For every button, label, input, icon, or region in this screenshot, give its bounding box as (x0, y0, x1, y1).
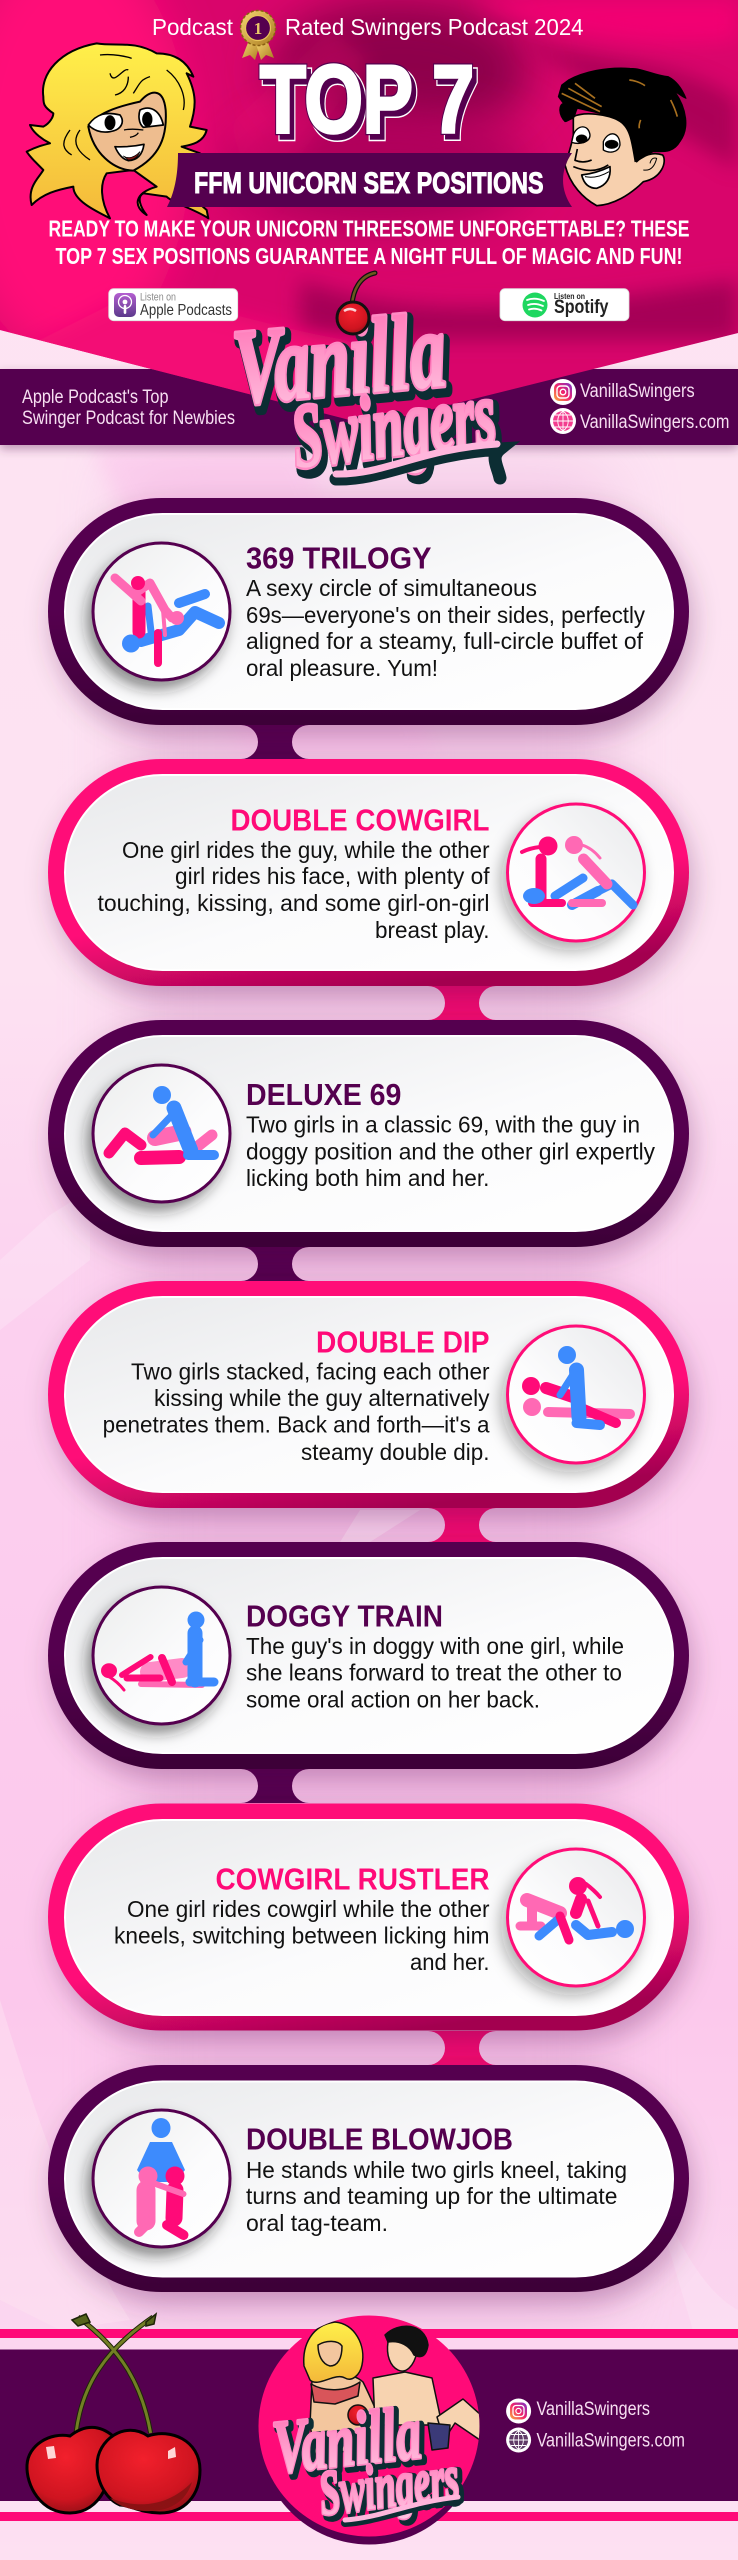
band text: Apple Podcast's top: Apple Podcast's Top (22, 387, 168, 408)
logo: footer Vanilla Swingers: Vanilla (269, 2391, 425, 2490)
panel: Deluxe 69 (48, 1020, 689, 1247)
title: TOP 7: TOP 7 (264, 51, 478, 158)
description: Two girls in a classic 69, with the guy in (246, 1112, 640, 1138)
badge: Apple Podcasts (109, 289, 238, 321)
icon: Instagram (550, 379, 576, 405)
connector: card 1 to 2 (241, 725, 309, 759)
description: oral tag-team. (246, 2210, 388, 2236)
icon: double cowgirl pictogram (508, 804, 644, 941)
icon: podcast symbol (114, 293, 136, 317)
description: girl rides his face, with plenty of (175, 863, 490, 889)
description: A sexy circle of simultaneous (246, 575, 537, 601)
footer bands (0, 2329, 738, 2521)
ribbon: subtitle banner (167, 153, 572, 207)
icon: double blowjob pictogram (93, 2110, 230, 2247)
description: Two girls stacked, facing each other (131, 1358, 490, 1384)
heading: DELUXE 69 (246, 1077, 401, 1112)
icon: globe (550, 408, 576, 434)
social links: VanillaSwingers (580, 381, 695, 402)
panel: 369 Trilogy (48, 498, 689, 725)
logo word: Vanilla (229, 291, 454, 433)
logo word: Swingers: Swingers (286, 362, 501, 488)
logo: footer Vanilla Swingers: Swingers (318, 2444, 466, 2532)
description: kneels, switching between licking him (114, 1922, 490, 1948)
description: steamy double dip. (301, 1439, 490, 1465)
character: blonde woman head (27, 43, 208, 218)
description: doggy position and the other girl expertly (246, 1138, 655, 1164)
header drape background (0, 0, 738, 430)
connector: card 5 to 6 (241, 1769, 309, 1803)
logo word: Swingers: Swingers (286, 362, 501, 488)
icon: number one medal: 1 (254, 19, 262, 38)
badge: Apple Podcasts: Listen on (140, 292, 176, 304)
top rating line: Podcast (152, 14, 233, 40)
connector: card 6 to 7 (428, 2031, 496, 2065)
description: The guy's in doggy with one girl, while (246, 1633, 624, 1659)
title: TOP 7: TOP 7 (264, 51, 478, 158)
heading: DOUBLE BLOWJOB (246, 2122, 513, 2157)
description (103, 1358, 490, 1465)
panel: Cowgirl Rustler (48, 1804, 689, 2030)
heading: DOUBLE COWGIRL (230, 803, 490, 838)
description: penetrates them. Back and forth—it's a (103, 1412, 490, 1438)
description (246, 575, 645, 681)
badge: Spotify (500, 289, 629, 321)
logo word: Swingers: Swingers (290, 366, 505, 492)
icon: number one medal (240, 10, 276, 60)
description: One girl rides the guy, while the other (122, 837, 490, 863)
band text: Apple Podcast's top (22, 387, 235, 429)
title: TOP 7: TOP 7 (260, 46, 474, 153)
connector: card 4 to 5 (428, 1508, 496, 1542)
panel: Double Blowjob (48, 2065, 689, 2292)
description (98, 837, 490, 943)
intro text (48, 216, 690, 269)
icon: footer globe (506, 2428, 531, 2452)
band: podcast info strip (0, 369, 738, 445)
band text: Apple Podcast's top: Swinger Podcast for Newbies (22, 408, 235, 429)
connector: card 3 to 4 (241, 1247, 309, 1281)
description: licking both him and her. (246, 1165, 489, 1191)
description: He stands while two girls kneel, taking (246, 2157, 627, 2183)
description: she leans forward to treat the other to (246, 1660, 622, 1686)
icon: cherry (337, 273, 375, 334)
description: aligned for a steamy, full-circle buffet of (246, 628, 644, 654)
badge: footer circle with characters and logo (258, 2316, 482, 2544)
heading: 369 TRILOGY (246, 541, 432, 576)
description: some oral action on her back. (246, 1686, 540, 1712)
logo: footer Vanilla Swingers: Vanilla (272, 2394, 428, 2493)
icon: footer cherry (348, 2405, 368, 2425)
icon: Spotify symbol (522, 292, 548, 318)
description (246, 1633, 624, 1712)
description: breast play. (375, 917, 490, 943)
logo word: Vanilla: Vanilla (229, 291, 450, 428)
description (246, 2157, 627, 2236)
panel: Double Cowgirl (48, 759, 689, 986)
logo: footer Vanilla Swingers: Vanilla (269, 2391, 425, 2490)
title: TOP 7: TOP 7 (260, 46, 474, 153)
footer social links: VanillaSwingers.com (536, 2431, 685, 2452)
heading: DOUBLE DIP (316, 1324, 490, 1359)
badge: Apple Podcasts: Apple Podcasts (140, 302, 232, 319)
description: 69s—everyone's on their sides, perfectly (246, 602, 645, 628)
logo: footer Vanilla Swingers: Swingers (315, 2441, 463, 2529)
ribbon: subtitle banner: FFM UNICORN SEX POSITIONS (194, 167, 544, 200)
description (246, 1112, 655, 1191)
icon: twin cherries (27, 2314, 200, 2513)
icon: footer Instagram (506, 2398, 531, 2424)
description: kissing while the guy alternatively (154, 1385, 490, 1411)
logo: Vanilla Swingers with cherry (229, 273, 505, 493)
description: and her. (410, 1949, 490, 1975)
icon: 369 trilogy pictogram (93, 543, 230, 680)
heading: COWGIRL RUSTLER (216, 1862, 490, 1897)
connector: card 2 to 3 (428, 986, 496, 1020)
footer social links (506, 2398, 685, 2452)
logo word: Swingers (286, 361, 505, 493)
description (114, 1896, 490, 1975)
logo word: Vanilla: Vanilla (229, 291, 450, 428)
social links (550, 379, 729, 434)
top rating line (152, 10, 584, 60)
description: One girl rides cowgirl while the other (127, 1896, 490, 1922)
badge: Spotify: Spotify (554, 297, 609, 318)
logo: footer Vanilla Swingers (269, 2391, 466, 2532)
description: turns and teaming up for the ultimate (246, 2183, 617, 2209)
panel: Doggy Train (48, 1542, 689, 1769)
icon: doggy train pictogram (93, 1587, 230, 1724)
footer social links: VanillaSwingers (536, 2399, 650, 2420)
character: dark-haired man head (558, 68, 686, 206)
description: touching, kissing, and some girl-on-girl (98, 890, 490, 916)
badge: Spotify: Listen on (554, 292, 585, 301)
icon: cowgirl rustler pictogram (508, 1849, 644, 1986)
description: oral pleasure. Yum! (246, 655, 438, 681)
top rating line: Rated Swingers Podcast 2024 (285, 14, 584, 40)
icon: double dip pictogram (508, 1326, 644, 1463)
icon: deluxe 69 pictogram (93, 1065, 230, 1202)
panel: Double Dip (48, 1281, 689, 1508)
logo: footer Vanilla Swingers: Swingers (315, 2441, 463, 2529)
logo swash (336, 444, 500, 479)
heading: DOGGY TRAIN (246, 1599, 443, 1634)
logo word: Vanilla: Vanilla (232, 296, 454, 433)
characters (304, 2322, 482, 2458)
